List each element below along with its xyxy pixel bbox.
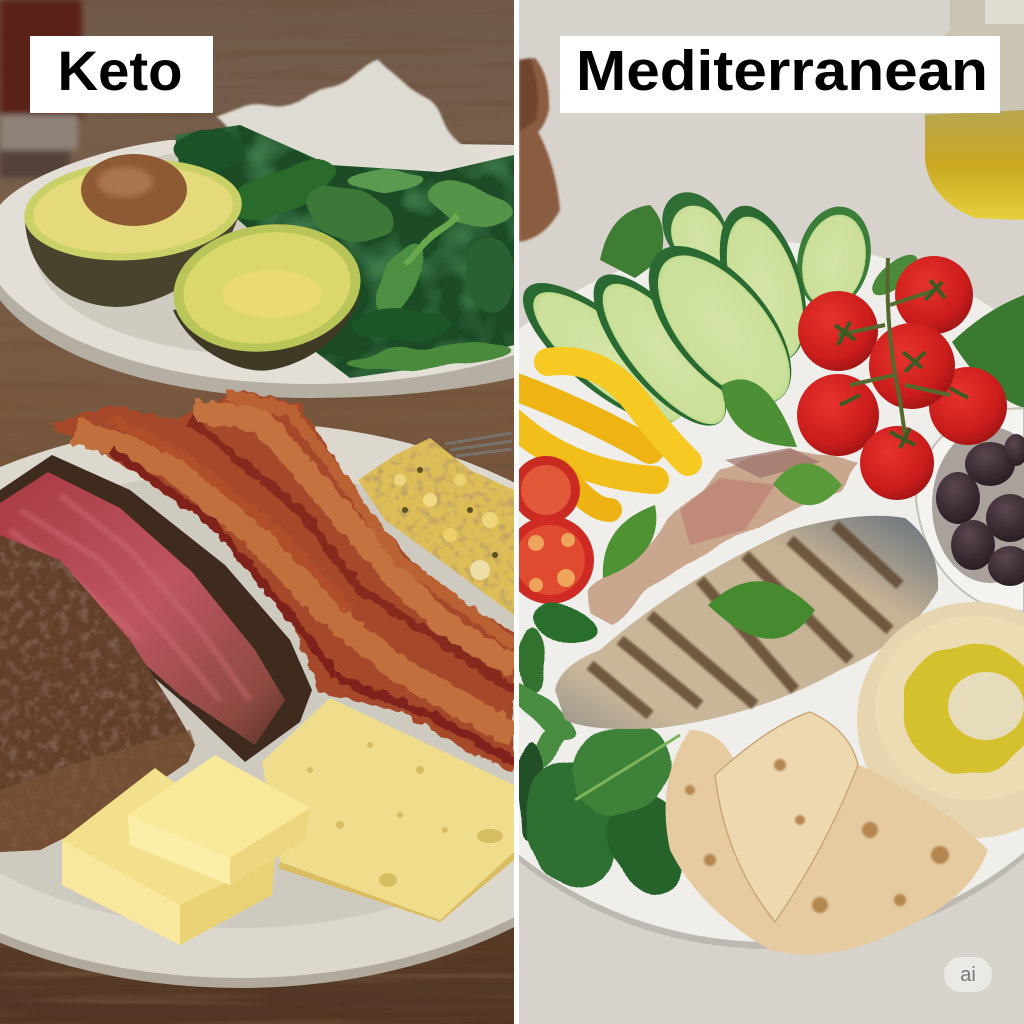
rare sliced steak bbox=[0, 455, 312, 762]
bacon strips bbox=[48, 390, 514, 772]
grilled fish bbox=[555, 516, 938, 729]
avocado half with hollow bbox=[173, 224, 360, 371]
heading: Keto bbox=[30, 36, 213, 113]
seared steak bbox=[0, 535, 195, 852]
drinking glass bbox=[0, 0, 82, 178]
soft white cheese bbox=[215, 62, 482, 175]
panel: keto bbox=[0, 0, 514, 1024]
front plate bbox=[0, 426, 514, 988]
heading: Keto: Keto bbox=[58, 39, 182, 102]
butter lower block bbox=[62, 768, 275, 945]
pita bread bbox=[666, 712, 988, 954]
basil leaves bbox=[603, 379, 842, 639]
spinach salad bbox=[174, 125, 515, 378]
linen table background bbox=[519, 0, 1024, 1024]
butter upper block bbox=[128, 755, 310, 885]
fork tines bbox=[445, 433, 512, 456]
olive oil bottle bbox=[925, 0, 1024, 220]
back plate bbox=[0, 140, 514, 398]
spinach behind cucumbers bbox=[600, 205, 1024, 408]
scrambled egg bbox=[358, 438, 514, 615]
dinner plate bbox=[519, 242, 1024, 949]
heading: Mediterranean: Mediterranean bbox=[576, 39, 988, 103]
avocado half with pit bbox=[21, 153, 245, 307]
grilled chicken bbox=[588, 448, 860, 622]
hummus with olive oil bbox=[857, 602, 1024, 838]
wood table background bbox=[0, 0, 514, 1024]
tomato slices bbox=[519, 456, 594, 604]
divider bbox=[514, 0, 519, 1024]
panel: mediterranean bbox=[519, 0, 1024, 1024]
yellow pepper strips bbox=[510, 361, 688, 510]
swiss cheese slice bbox=[262, 698, 514, 922]
pepper mill bbox=[519, 58, 560, 242]
olive bowl bbox=[916, 408, 1024, 612]
ai watermark badge: ai bbox=[960, 964, 976, 986]
tomatoes on the vine bbox=[797, 256, 1007, 500]
spinach lower left bbox=[519, 602, 682, 895]
ai watermark badge bbox=[944, 957, 992, 992]
cucumber slices bbox=[523, 192, 871, 426]
